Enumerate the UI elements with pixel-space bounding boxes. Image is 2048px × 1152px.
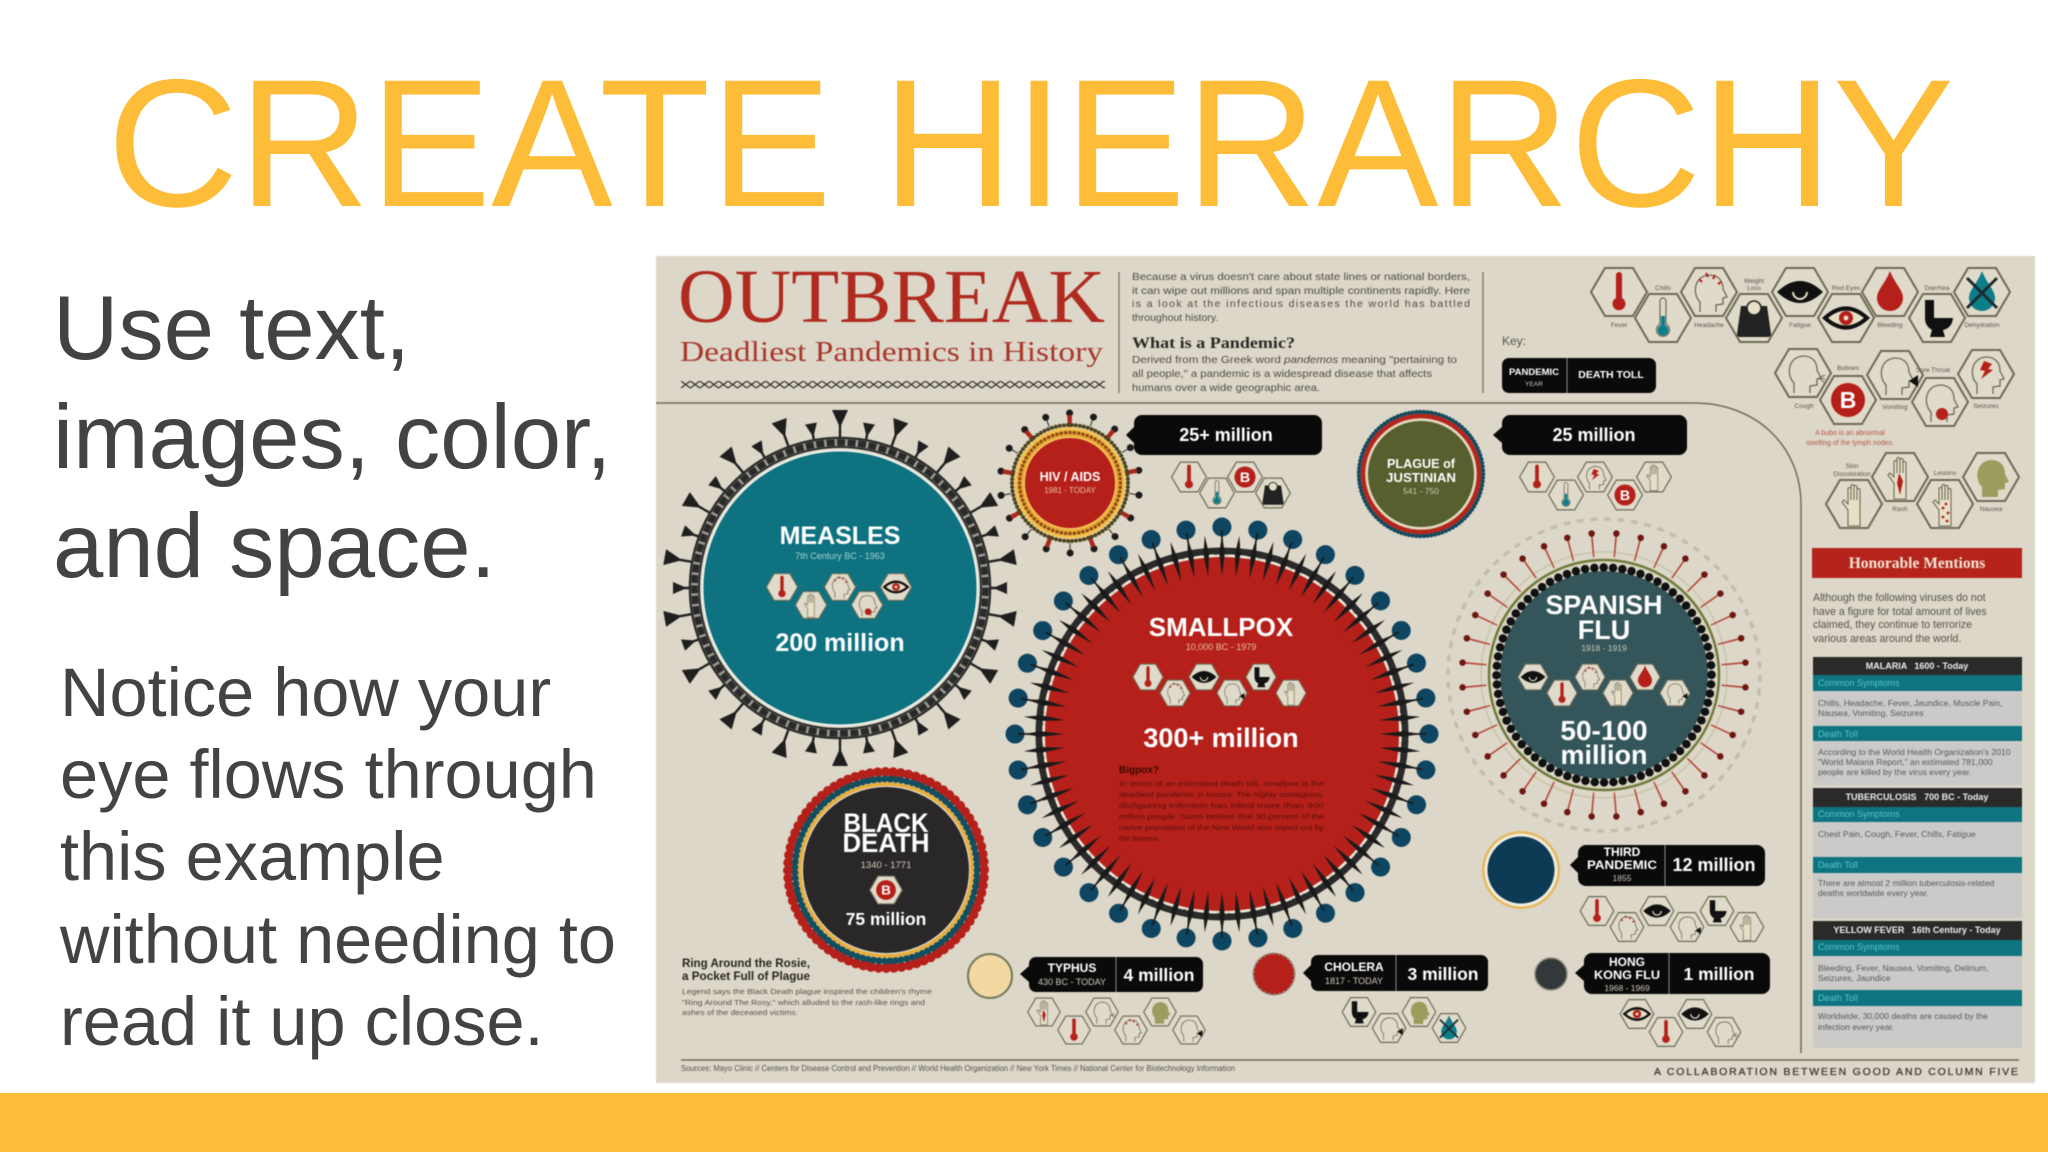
justinian symptoms [1520, 462, 1671, 510]
malaria card: "World Malaria Report," an estimated 781,000 [1818, 757, 1993, 767]
symptom key icons: Seizures [1973, 403, 1999, 410]
intro text [1132, 271, 1470, 324]
symptom key icons: Discoloration [1833, 471, 1871, 478]
yellow fever card: Worldwide, 30,000 deaths are caused by the [1818, 1011, 1988, 1021]
heading text: use text, images, color, and space: and space. [53, 496, 496, 597]
heading text: use text, images, color, and space [53, 278, 611, 597]
third pandemic symptoms [1580, 897, 1764, 941]
hong kong flu symptoms [1620, 1000, 1741, 1046]
smallpox circle: deadliest pandemic in history. The highly contagious, [1119, 790, 1324, 799]
third pandemic label [1570, 845, 1765, 886]
body text: notice how your eye flows [59, 654, 616, 1060]
body text: notice how your eye flows: without needing to [59, 901, 616, 978]
malaria card: Nausea, Vomiting, Seizures [1818, 708, 1924, 718]
body text: notice how your eye flows: read it up close. [60, 983, 544, 1060]
honorable mentions heading [1812, 548, 2022, 578]
key: DEATH TOLL [1578, 369, 1644, 381]
spanish flu circle: 50-100 [1560, 715, 1648, 746]
typhus circle [968, 954, 1012, 998]
black death circle: DEATH [842, 828, 930, 858]
smallpox circle: In terms of an estimated death toll, smallpox is the [1119, 779, 1324, 788]
measles circle [615, 377, 1065, 799]
malaria card: people are killed by the virus every year. [1818, 767, 1971, 777]
tuberculosis card: Common Symptoms [1818, 809, 1900, 819]
third pandemic label: 12 million [1672, 855, 1756, 875]
ring around the rosie note: ashes of the deceased victims. [682, 1008, 798, 1017]
smallpox circle: Bigpox? [1119, 765, 1159, 776]
honorable mentions intro: have a figure for total amount of lives [1813, 606, 1987, 618]
yellow fever card: YELLOW FEVER 16th Century - Today [1833, 925, 2001, 935]
typhus label: 4 million [1124, 965, 1194, 985]
typhus symptoms [1028, 998, 1205, 1044]
sources: Sources: Mayo Clinic // Centers for Disease Control and Prevention // World Health Organization // New York Times // National Center for Biotechnology Information [681, 1064, 1235, 1073]
symptom key icons: Vomiting [1883, 404, 1908, 411]
typhus label [1020, 957, 1203, 992]
intro text: throughout history. [1132, 312, 1218, 324]
cholera label: 1817 - TODAY [1325, 976, 1383, 986]
smallpox circle: disfiguring infection has killed more than 300 [1119, 801, 1324, 810]
symptom key icons: Red Eyes [1832, 285, 1861, 292]
spanish flu circle: SPANISH [1546, 590, 1662, 620]
symptom key icons: Fever [1611, 322, 1628, 329]
hong kong flu label: 1968 - 1969 [1604, 983, 1650, 993]
spanish flu circle: 1918 - 1919 [1581, 643, 1627, 653]
hiv aids circle: 1981 - TODAY [1044, 486, 1096, 495]
symptom key icons: Chills [1655, 285, 1672, 292]
infographic title: OUTBREAK [678, 255, 1105, 339]
hong kong flu label: KONG FLU [1594, 968, 1660, 982]
symptom key icons: Buboes [1837, 365, 1860, 372]
ring around the rosie note: Legend says the Black Death plague inspired the children's rhyme [682, 987, 932, 996]
plague of justinian circle [1359, 412, 1483, 536]
cholera symptoms [1342, 998, 1466, 1042]
smallpox circle: SMALLPOX [1149, 612, 1294, 642]
symptom key icons: Diarrhea [1925, 285, 1950, 292]
malaria card: MALARIA 1600 - Today [1866, 661, 1968, 671]
plague of justinian circle: PLAGUE of [1387, 456, 1456, 471]
symptom key icons: Lesions [1934, 470, 1957, 477]
body text: notice how your eye flows: this example [60, 818, 445, 895]
tuberculosis card: deaths worldwide every year. [1818, 888, 1929, 898]
smallpox circle [991, 507, 1439, 961]
intro text: it can wipe out millions and span multiple continents rapidly. Here [1132, 285, 1470, 297]
malaria card [1813, 657, 2022, 785]
heading text: use text, images, color, and space: images, color, [53, 387, 611, 488]
spanish flu circle: million [1560, 740, 1648, 770]
measles circle: 7th Century BC - 1963 [795, 551, 885, 561]
hong kong flu circle [1535, 958, 1567, 990]
third pandemic label: 1855 [1613, 873, 1632, 883]
measles circle: MEASLES [780, 522, 900, 550]
honorable mentions intro: claimed, they continue to terrorize [1813, 619, 1972, 631]
smallpox circle: native population of the New World was wiped out by [1119, 823, 1324, 832]
cholera label [1303, 955, 1488, 991]
ring around the rosie note: a Pocket Full of Plague [682, 971, 810, 983]
yellow fever card: infection every year. [1818, 1022, 1894, 1032]
tuberculosis card: Death Toll [1818, 860, 1858, 870]
symptom key icons: Fatigue [1789, 322, 1811, 329]
symptom key icons: Rash [1892, 506, 1908, 513]
header rules [1119, 272, 1483, 393]
yellow fever card: Common Symptoms [1818, 942, 1900, 952]
smallpox circle: 10,000 BC - 1979 [1186, 642, 1256, 652]
symptom key icons [1591, 268, 2019, 528]
body text: notice how your eye flows: Notice how your [60, 654, 551, 731]
hiv aids death toll [1126, 415, 1322, 455]
hiv aids circle: HIV / AIDS [1040, 470, 1100, 484]
typhus label: 430 BC - TODAY [1038, 977, 1106, 987]
malaria card: Chills, Headache, Fever, Jaundice, Muscle Pain, [1818, 698, 2002, 708]
third pandemic label: PANDEMIC [1587, 858, 1657, 872]
honorable mentions heading: Honorable Mentions [1849, 555, 1985, 572]
infographic title [678, 255, 1105, 389]
symptom key icons: Loss [1747, 285, 1762, 292]
honorable mentions intro: various areas around the world. [1813, 633, 1961, 645]
honorable mentions intro: Although the following viruses do not [1813, 592, 1986, 604]
symptom key icons: Skin [1846, 463, 1859, 470]
black death circle: 75 million [846, 909, 926, 929]
hong kong flu label: 1 million [1684, 964, 1754, 984]
intro text: is a look at the infectious diseases the world has battled [1132, 298, 1470, 310]
tuberculosis card: Chest Pain, Cough, Fever, Chills, Fatigue [1818, 829, 1976, 839]
plague of justinian circle: JUSTINIAN [1386, 470, 1456, 485]
yellow fever card [1813, 921, 2022, 1048]
cholera circle [1253, 953, 1295, 995]
hong kong flu label: HONG [1609, 955, 1645, 969]
key: PANDEMIC [1509, 367, 1559, 378]
cholera label: 3 million [1408, 964, 1478, 984]
third pandemic circle [1482, 831, 1560, 909]
cholera label: CHOLERA [1324, 960, 1384, 974]
plague of justinian circle: 541 - 750 [1403, 486, 1439, 496]
ring around the rosie note: Ring Around the Rosie, [682, 958, 810, 970]
tuberculosis card: TUBERCULOSIS 700 BC - Today [1846, 792, 1988, 802]
symptom key icons: Dehydration [1964, 322, 2000, 329]
malaria card: Death Toll [1818, 729, 1858, 739]
key [1502, 334, 1656, 393]
tuberculosis card: There are almost 2 million tuberculosis-related [1818, 878, 1994, 888]
footer bar [0, 1093, 2048, 1152]
ring around the rosie note [682, 958, 932, 1017]
hong kong flu label [1575, 953, 1770, 994]
malaria card: According to the World Health Organization's 2010 [1818, 747, 2011, 757]
justinian death toll: 25 million [1552, 425, 1636, 445]
symptom key icons: swelling of the lymph nodes. [1806, 440, 1894, 447]
intro text: Because a virus doesn't care about state lines or national borders, [1132, 271, 1470, 283]
yellow fever card: Seizures, Jaundice [1818, 973, 1891, 983]
what is a pandemic: Derived from the Greek word pandemos meaning "pertaining to [1132, 354, 1457, 366]
what is a pandemic: What is a Pandemic? [1132, 335, 1295, 352]
honorable mentions intro [1813, 592, 1987, 645]
infographic title: Deadliest Pandemics in History [680, 336, 1104, 368]
yellow fever card: Bleeding, Fever, Nausea, Vomiting, Delirium, [1818, 963, 1989, 973]
hiv aids symptoms [1172, 462, 1290, 508]
symptom key icons: Bleeding [1877, 322, 1903, 329]
body text: notice how your eye flows: eye flows through [60, 736, 597, 813]
typhus label: TYPHUS [1048, 961, 1096, 975]
symptom key icons: Nausea [1980, 506, 2003, 513]
yellow fever card: Death Toll [1818, 993, 1858, 1003]
measles circle: 200 million [775, 629, 905, 657]
black death circle [788, 772, 984, 968]
black death circle: 1340 - 1771 [861, 860, 911, 871]
symptom key icons: Sore Throat [1916, 367, 1950, 374]
symptom key icons: Cough [1794, 403, 1814, 410]
symptom key icons: Headache [1694, 322, 1724, 329]
what is a pandemic [1132, 335, 1457, 394]
hiv aids death toll: 25+ million [1179, 425, 1273, 445]
what is a pandemic: humans over a wide geographic area. [1132, 382, 1320, 394]
symptom key icons: Weight [1744, 278, 1764, 285]
heading text: use text, images, color, and space: Use text, [53, 278, 410, 379]
malaria card: Common Symptoms [1818, 678, 1900, 688]
spanish flu circle: FLU [1578, 615, 1630, 645]
third pandemic label: THIRD [1604, 845, 1641, 859]
smallpox circle: 300+ million [1143, 723, 1299, 753]
collaboration credit: A COLLABORATION BETWEEN GOOD AND COLUMN FIVE [1654, 1066, 2018, 1078]
tuberculosis card [1813, 788, 2022, 918]
black death circle: BLACK [844, 808, 929, 838]
spanish flu circle [1448, 519, 1760, 831]
smallpox circle: million people. Some believe that 90 percent of the [1119, 812, 1324, 821]
key: YEAR [1525, 381, 1543, 388]
justinian death toll [1493, 415, 1687, 455]
symptom key icons: A bubo is an abnormal [1815, 430, 1885, 437]
title: CREATE HIERARCHY [107, 41, 1954, 245]
smallpox circle: the disease. [1119, 834, 1160, 843]
hiv aids circle [1000, 413, 1140, 553]
ring around the rosie note: "Ring Around The Rosy," which alluded to the rash-like rings and [682, 998, 925, 1007]
what is a pandemic: all people," a pandemic is a widespread disease that affects [1132, 368, 1432, 380]
panel: outbreak infographic [615, 255, 2035, 1083]
key: Key: [1502, 334, 1526, 348]
